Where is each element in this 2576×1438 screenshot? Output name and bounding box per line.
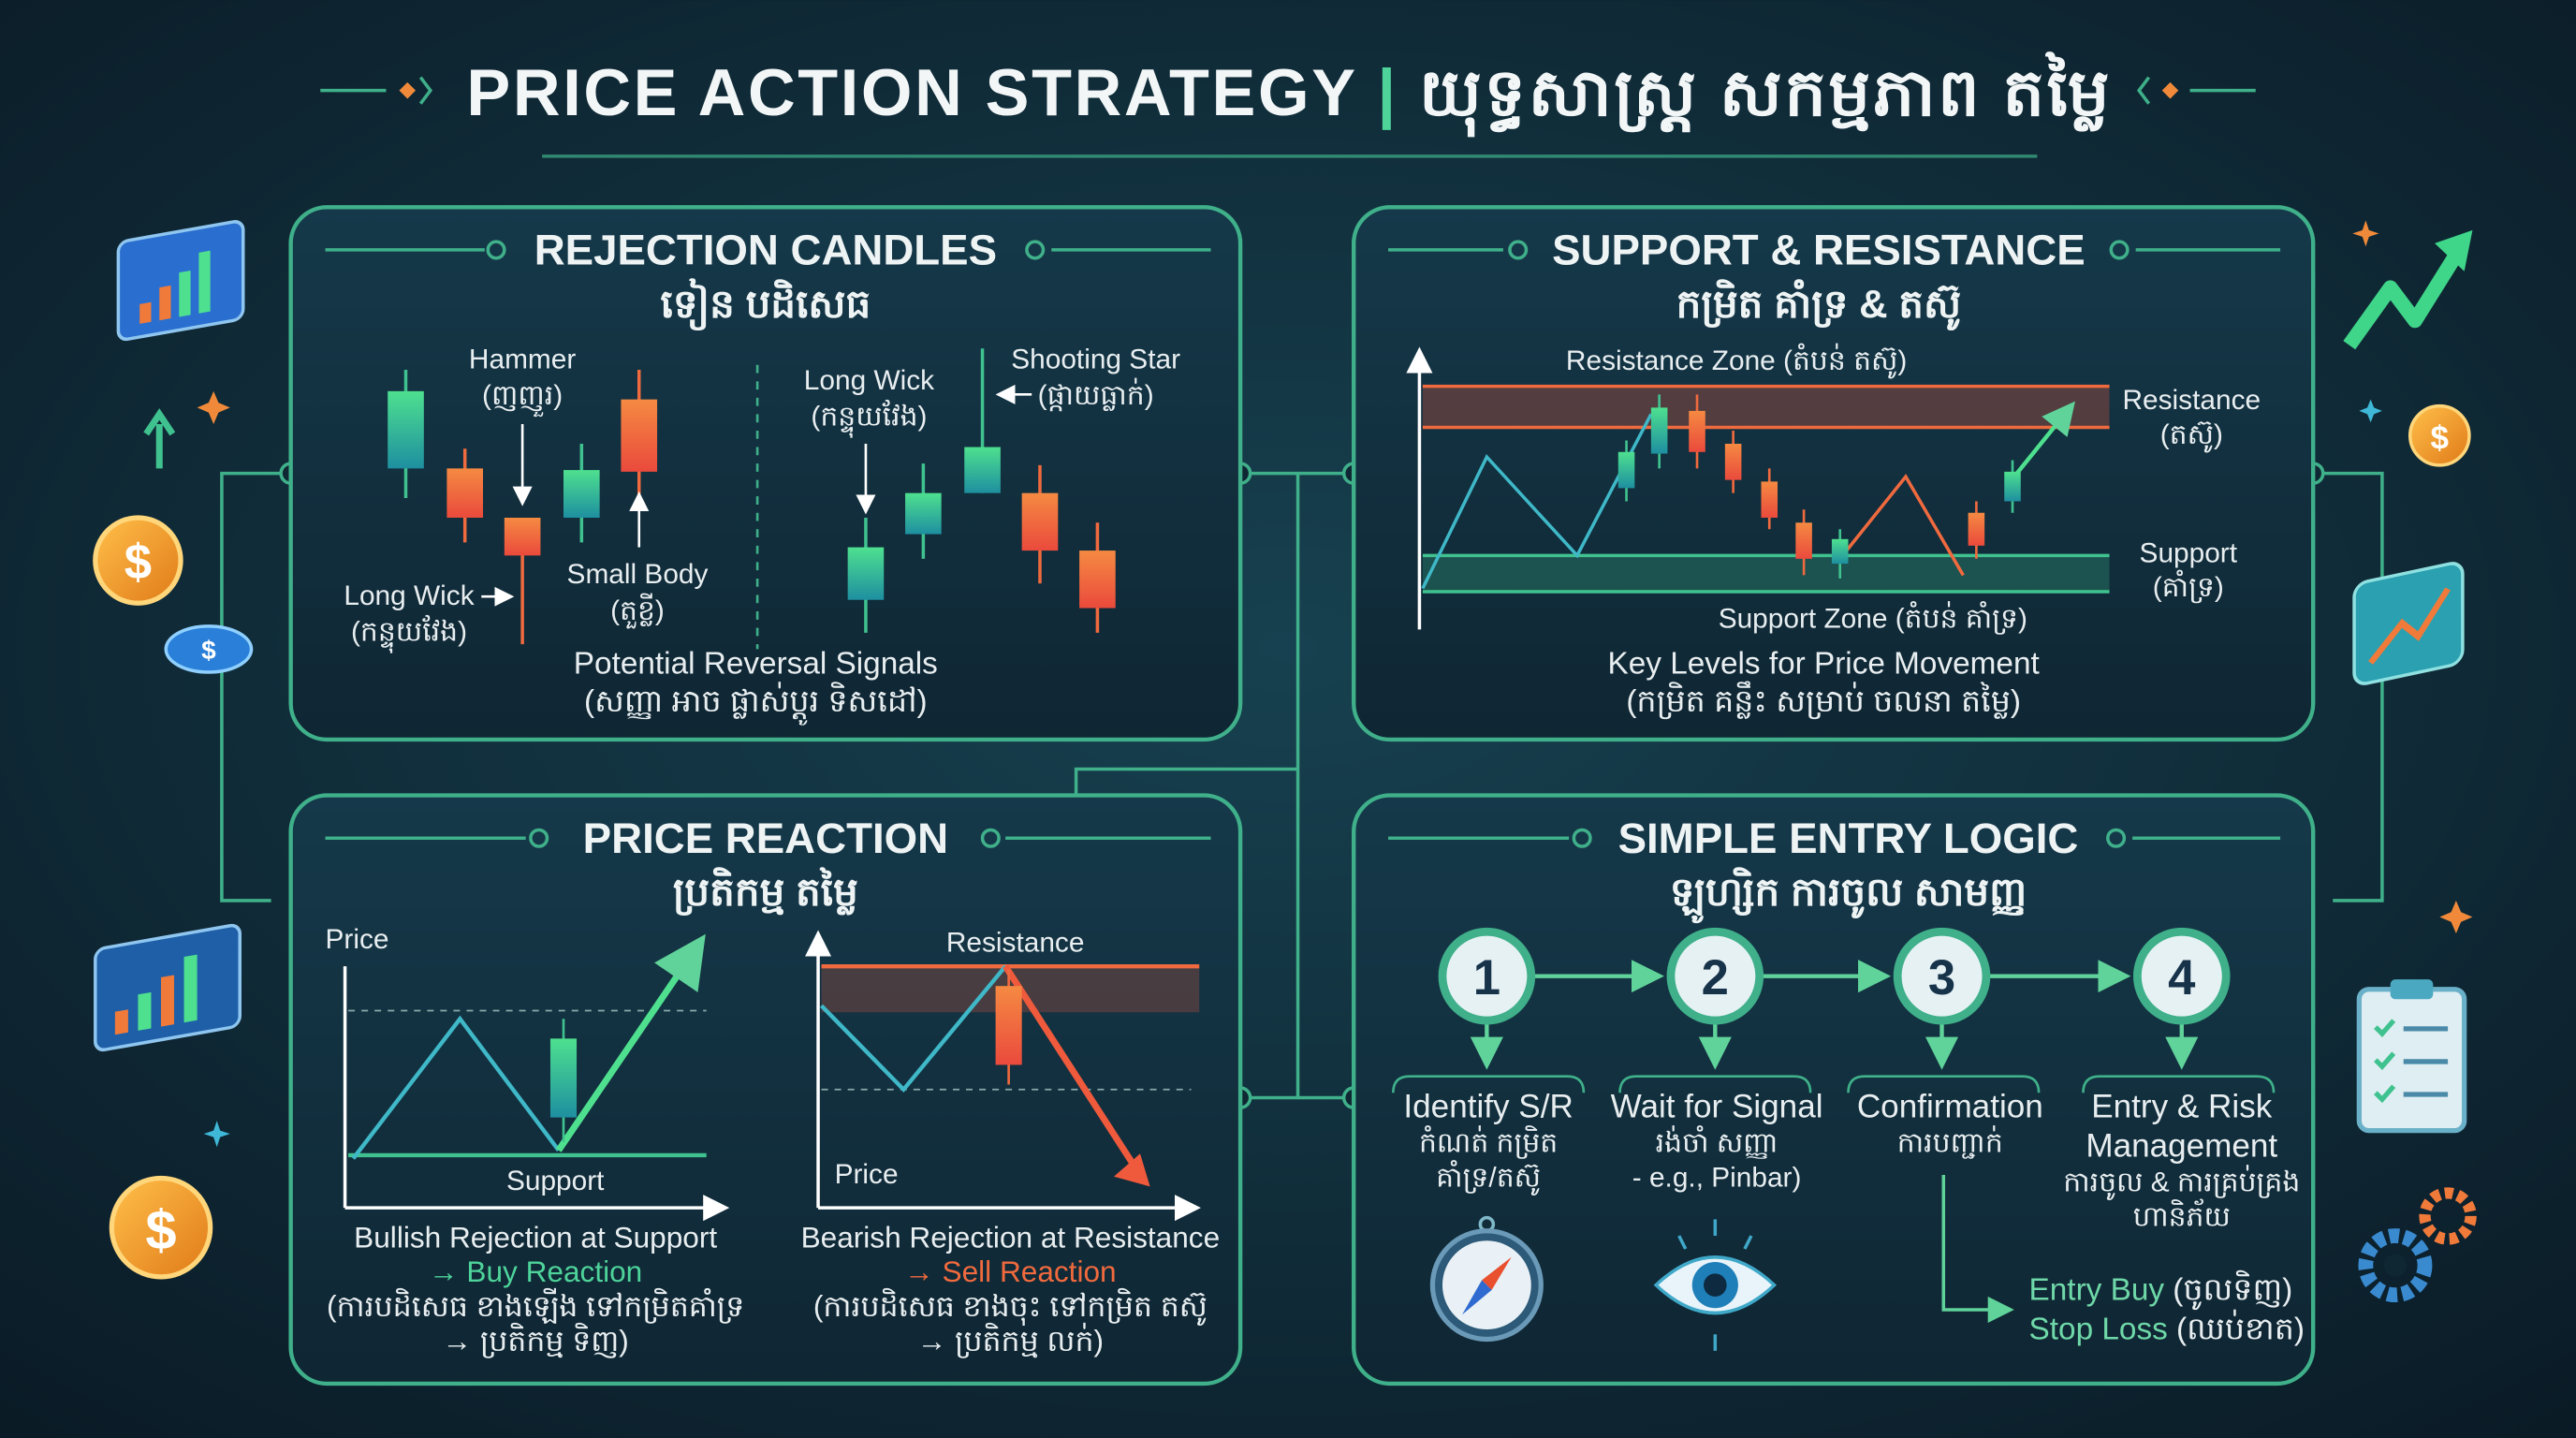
labels left group: Hammer — [469, 344, 576, 374]
heading: entry logic: SIMPLE ENTRY LOGIC — [1618, 814, 2078, 862]
callout: entry buy / stop loss — [1943, 1175, 2305, 1347]
labels: S/R: Resistance — [2123, 385, 2261, 416]
caption: bullish: Bullish Rejection at Support — [354, 1220, 717, 1254]
caption: bearish: → Sell Reaction — [904, 1255, 1117, 1288]
chart: S/R zones — [1419, 353, 2110, 629]
icon: coin bottom left: $ — [145, 1198, 177, 1261]
steps: 1 — [1473, 950, 1500, 1005]
heading: support & resistance: កម្រិត គាំទ្រ & តស៊ូ — [1676, 279, 1961, 331]
heading: rejection candles — [326, 227, 1211, 331]
steps: រង់ចាំ សញ្ញា — [1656, 1124, 1778, 1159]
panel: rejection candles — [291, 207, 1240, 740]
labels: S/R — [1566, 343, 2261, 636]
chart: bearish rejection: Price — [835, 1159, 899, 1190]
chart: bearish rejection — [818, 927, 1199, 1208]
callout: entry buy / stop loss: Entry Buy (ចូលទិញ) — [2029, 1269, 2292, 1310]
candles right group — [848, 348, 1116, 633]
panel: support & resistance — [1354, 207, 2313, 740]
icon: coin right — [2410, 406, 2469, 465]
caption: bearish: → ប្រតិកម្ម លក់) — [917, 1322, 1104, 1358]
labels right group — [804, 344, 1180, 509]
title — [320, 51, 2256, 156]
caption: key levels: (កម្រិត គន្លឹះ សម្រាប់ ចលនា តម្លៃ) — [1626, 681, 2021, 720]
labels left group: (ញញួរ) — [482, 380, 563, 418]
labels left group — [344, 344, 708, 654]
icon: up arrow left — [146, 414, 172, 468]
steps: Entry & Risk — [2091, 1089, 2273, 1125]
steps: Management — [2086, 1128, 2277, 1165]
labels right group: (ផ្កាយធ្លាក់) — [1038, 377, 1154, 412]
icon: coin bottom left — [111, 1179, 211, 1277]
caption: key levels: Key Levels for Price Movement — [1608, 647, 2041, 682]
labels: S/R: Resistance Zone (តំបន់ តស៊ូ) — [1566, 343, 1907, 379]
heading: rejection candles: ទៀន បដិសេធ — [661, 278, 871, 331]
labels: S/R: Support — [2140, 537, 2238, 568]
connectors — [222, 463, 2382, 1108]
title: PRICE ACTION STRATEGY | យុទ្ធសាស្ត្រ សកម្មភាព តម្លៃ — [466, 51, 2110, 138]
icon: blue token — [166, 626, 252, 672]
heading: rejection candles: REJECTION CANDLES — [534, 227, 997, 274]
steps: 3 — [1928, 950, 1955, 1005]
icon: coin left — [95, 518, 181, 603]
heading: support & resistance — [1388, 227, 2280, 331]
labels left group: Small Body — [567, 559, 708, 590]
caption: bullish: → ប្រតិកម្ម ទិញ) — [442, 1322, 629, 1358]
icon: gears — [2365, 1193, 2471, 1295]
chart: bullish rejection — [326, 924, 723, 1208]
icon: chart card top left — [118, 220, 243, 341]
steps: ហានិភ័យ — [2133, 1198, 2231, 1232]
panel: price reaction — [291, 796, 1240, 1384]
heading: price reaction: PRICE REACTION — [583, 814, 948, 862]
steps: Confirmation — [1857, 1089, 2043, 1125]
caption: bullish: (ការបដិសេធ ខាងឡើង ទៅកម្រិតគាំទ្រ — [327, 1287, 744, 1324]
caption: bullish — [327, 1220, 744, 1358]
heading: entry logic — [1388, 814, 2280, 924]
labels left group: (តួខ្លី) — [610, 593, 665, 629]
icon: clipboard — [2359, 979, 2465, 1131]
chart: bearish rejection: Resistance — [946, 927, 1084, 958]
steps: - e.g., Pinbar) — [1632, 1162, 1801, 1193]
caption: reversal signals — [574, 647, 938, 726]
labels: S/R: (គាំទ្រ) — [2153, 569, 2224, 604]
heading: entry logic: ឡូហ្សិក ការចូល សាមញ្ញ — [1670, 867, 2027, 924]
chart: bullish rejection: Price — [326, 924, 388, 955]
chart: bullish rejection: Support — [506, 1166, 605, 1196]
callout: entry buy / stop loss: Stop Loss (ឈប់ខាត) — [2029, 1310, 2305, 1347]
caption: bullish: → Buy Reaction — [429, 1255, 642, 1288]
caption: bearish: Bearish Rejection at Resistance — [801, 1220, 1220, 1254]
heading: price reaction — [326, 814, 1211, 916]
labels right group: Long Wick — [804, 365, 934, 396]
caption: bearish — [801, 1220, 1220, 1358]
caption: reversal signals: (សញ្ញា អាច ផ្លាស់ប្តូរ ទិសដៅ) — [584, 682, 928, 726]
sparkles — [198, 220, 2472, 933]
steps: ការចូល & ការគ្រប់គ្រង — [2063, 1165, 2300, 1201]
caption: bearish: (ការបដិសេធ ខាងចុះ ទៅកម្រិត តស៊ូ — [813, 1287, 1208, 1327]
steps: 4 — [2168, 950, 2195, 1005]
labels left group: (កន្ទុយវែង) — [351, 615, 467, 654]
steps: ការបញ្ជាក់ — [1897, 1124, 2003, 1159]
heading: support & resistance: SUPPORT & RESISTANCE — [1552, 227, 2086, 274]
caption: reversal signals: Potential Reversal Signals — [574, 647, 938, 682]
icon: compass — [1432, 1218, 1541, 1340]
steps — [1393, 932, 2300, 1232]
labels left group: Long Wick — [344, 580, 475, 611]
steps: គាំទ្រ/តស៊ូ — [1436, 1159, 1541, 1196]
icon: coin left: $ — [124, 535, 152, 590]
caption: key levels — [1608, 647, 2041, 720]
labels right group: (កន្ទុយវែង) — [811, 400, 927, 439]
icon: eye — [1656, 1219, 1775, 1351]
icon: chart card right — [2354, 561, 2463, 686]
panel: simple entry logic — [1354, 796, 2313, 1384]
steps: Wait for Signal — [1611, 1089, 1823, 1125]
icon: blue token: $ — [201, 636, 216, 665]
steps: Identify S/R — [1403, 1089, 1573, 1125]
labels right group: Shooting Star — [1011, 344, 1180, 374]
labels: S/R: Support Zone (តំបន់ គាំទ្រ) — [1719, 601, 2027, 636]
steps: 2 — [1702, 950, 1729, 1005]
heading: price reaction: ប្រតិកម្ម តម្លៃ — [673, 867, 858, 916]
icon: chart card bottom left — [95, 924, 240, 1051]
labels: S/R: (តស៊ូ) — [2160, 419, 2223, 453]
candles left group — [388, 370, 657, 644]
icon: coin right: $ — [2431, 419, 2450, 456]
steps: កំណត់ កម្រិត — [1419, 1124, 1558, 1159]
icon: green trend arrow right — [2349, 230, 2472, 345]
